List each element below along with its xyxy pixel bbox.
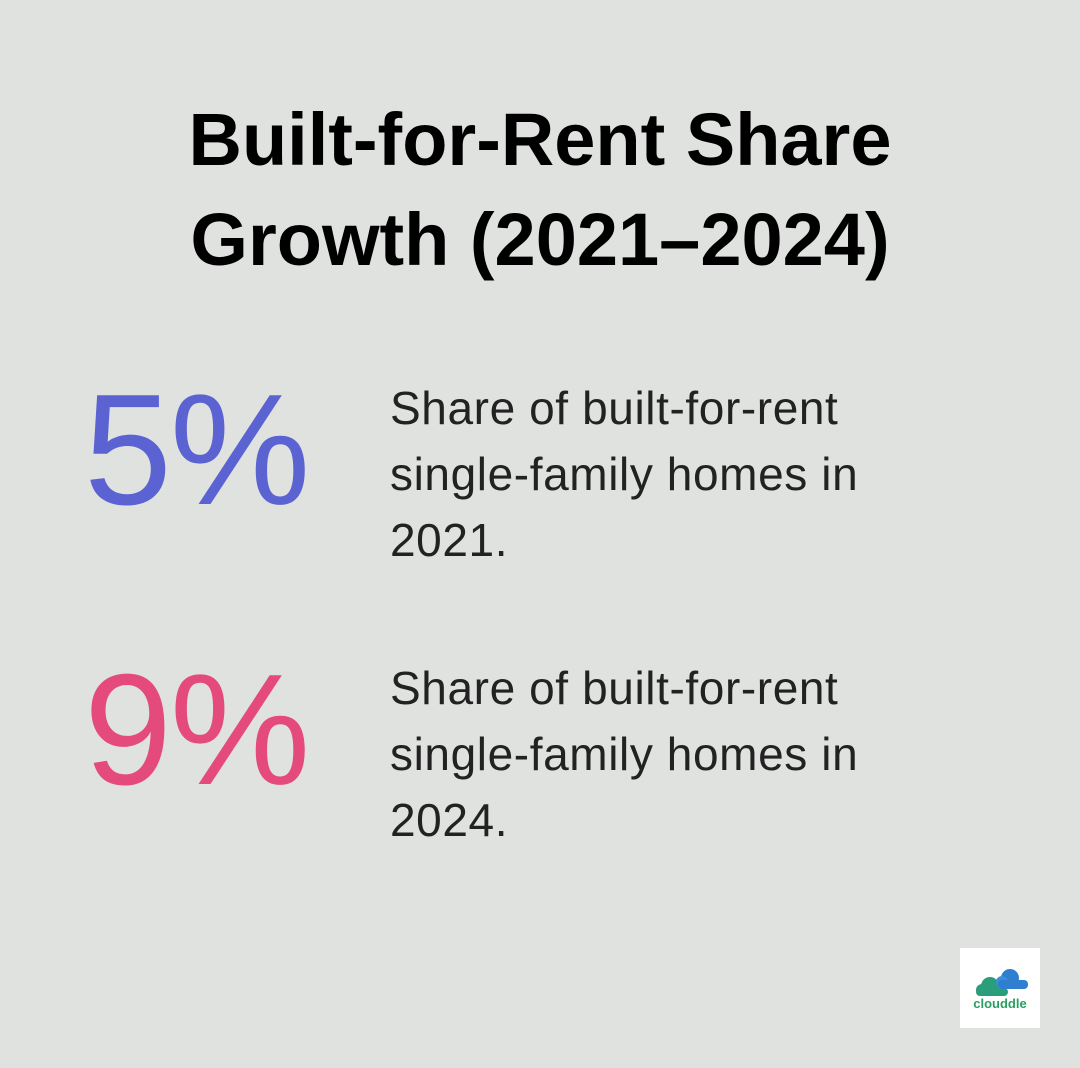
logo	[960, 948, 1040, 1028]
stat 9%: 9%	[84, 642, 308, 818]
title	[188, 98, 892, 281]
description 2021: 2021.	[390, 514, 508, 566]
title: Growth (2021–2024)	[190, 198, 890, 281]
description 2021: Share of built-for-rent	[390, 382, 838, 434]
stat 5%: 5%	[84, 362, 308, 538]
description 2024: single-family homes in	[390, 728, 858, 780]
description 2021: single-family homes in	[390, 448, 858, 500]
title: Built-for-Rent Share	[188, 98, 892, 181]
description 2024: Share of built-for-rent	[390, 662, 838, 714]
description 2021	[390, 382, 858, 566]
description 2024: 2024.	[390, 794, 508, 846]
logo: clouddle	[973, 996, 1027, 1011]
description 2024	[390, 662, 858, 846]
